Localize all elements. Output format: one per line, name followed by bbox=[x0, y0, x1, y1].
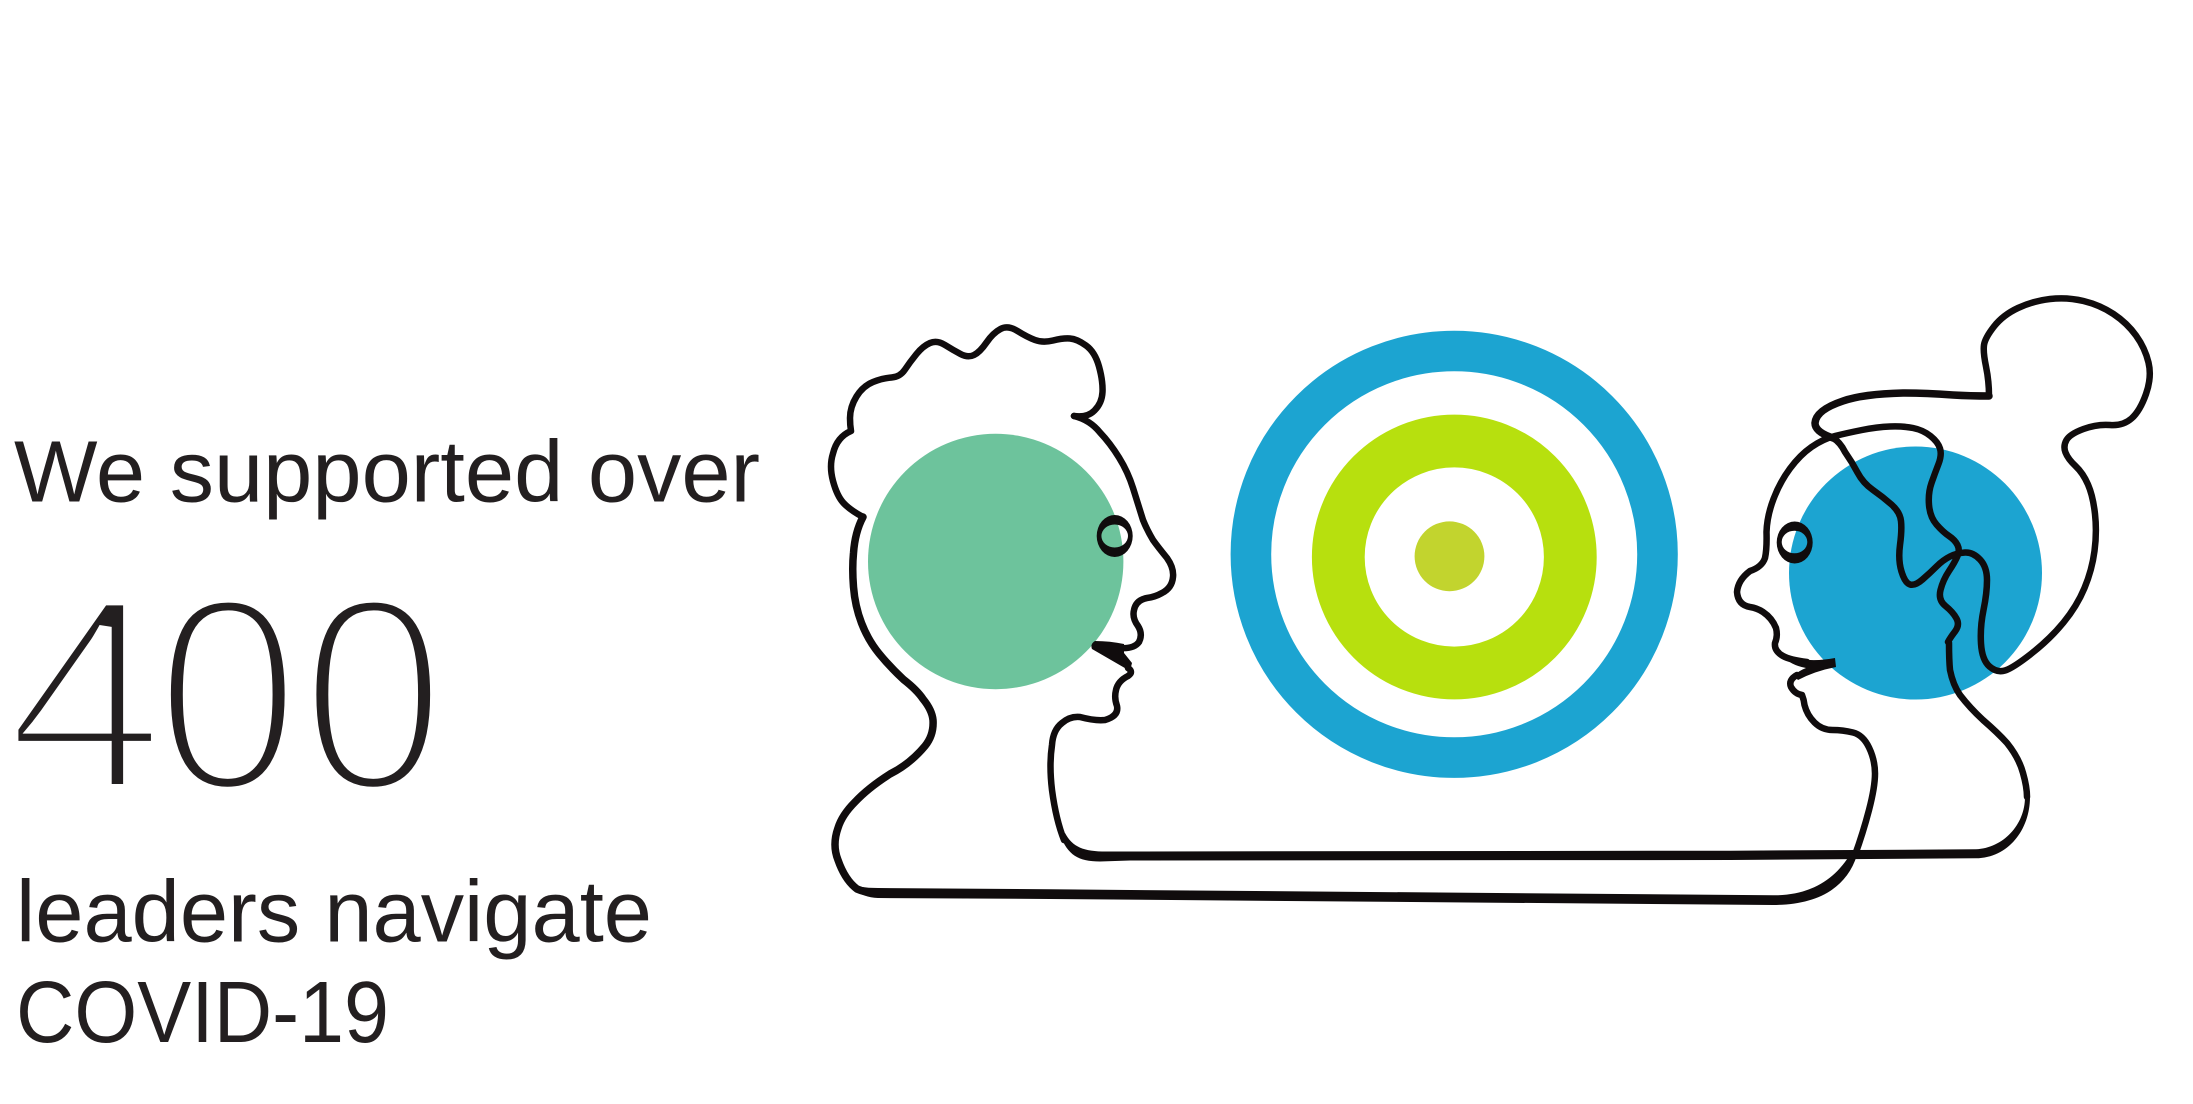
back of head and shoulder bbox=[835, 517, 933, 893]
forehead, nose and upper lip bbox=[1074, 416, 1173, 648]
text: intro line: We supported over bbox=[14, 424, 760, 520]
face and crown outline bbox=[1737, 426, 1959, 662]
circle: blue inside right head bbox=[1789, 446, 2042, 700]
text: leaders navigate: leaders navigate bbox=[16, 864, 652, 960]
connecting line: lower, from left head to right head bbox=[841, 853, 1857, 905]
connecting line: upper, from left head to right head bbox=[1060, 797, 2030, 862]
circle: green inside left head bbox=[868, 434, 1123, 689]
figure: left head line drawing bbox=[831, 327, 1173, 893]
chin and front of neck bbox=[1790, 675, 1875, 855]
mouth bbox=[1091, 641, 1132, 671]
eye bbox=[1097, 515, 1133, 557]
eye bbox=[1777, 522, 1813, 564]
ring: outer blue bbox=[1251, 351, 1657, 758]
ring: lime bbox=[1338, 441, 1570, 673]
flowing hair outline bbox=[1833, 298, 2150, 671]
text: big number 400: 00 bbox=[155, 539, 446, 849]
hair band across forehead bbox=[1815, 393, 1989, 438]
hair outline bbox=[831, 327, 1103, 517]
text: COVID-19: COVID-19 bbox=[16, 964, 389, 1061]
figure: right head line drawing bbox=[1737, 298, 2150, 855]
dot: centre bbox=[1415, 521, 1484, 591]
text block: statistic bbox=[6, 424, 760, 1061]
chin and neck bbox=[1050, 668, 1131, 840]
back of neck bbox=[1949, 643, 2027, 797]
mouth bbox=[1783, 656, 1836, 680]
target: concentric circles bbox=[1251, 351, 1657, 758]
text: big number 400: 4 bbox=[6, 539, 166, 849]
